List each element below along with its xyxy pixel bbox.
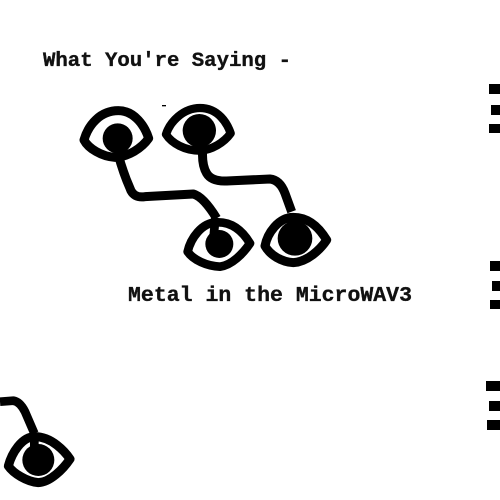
icon: eye 3	[188, 218, 250, 267]
bars: right edge group 2	[490, 261, 500, 309]
connector: eye 2 to eye 4	[202, 150, 292, 212]
icon: cropped eye with connector, bottom left	[0, 401, 70, 483]
bars: right edge group 3	[486, 381, 500, 430]
icon: eye 1	[84, 111, 149, 158]
subheading: Metal in the MicroWAV3: Metal in the MicroWAV3	[128, 284, 412, 308]
bars: right edge group 1	[489, 84, 500, 133]
speck above eye 2	[162, 105, 166, 106]
icon: eye 2	[166, 108, 231, 152]
connector: eye 1 to eye 3	[118, 155, 217, 218]
eye diagram: four linked eyes	[84, 105, 327, 267]
icon: eye 4	[265, 213, 327, 263]
heading: What You're Saying: What You're Saying -	[43, 50, 291, 73]
